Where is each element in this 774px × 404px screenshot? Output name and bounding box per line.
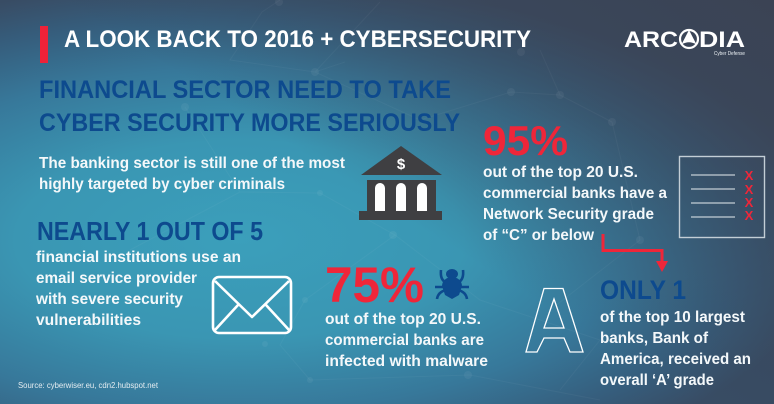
stat: 75% malware: commercial banks are xyxy=(325,332,484,349)
stat: 95% network security: Network Security grade xyxy=(483,206,654,223)
stat: 95% network security: 95% xyxy=(483,117,568,164)
stat: 75% malware: infected with malware xyxy=(325,353,488,370)
stat: nearly 1 out of 5 xyxy=(35,216,263,329)
heading: financial sector xyxy=(39,76,460,137)
stat: nearly 1 out of 5: with severe security xyxy=(35,291,183,308)
title: A LOOK BACK TO 2016 + CYBERSECURITY xyxy=(64,26,531,53)
icon: envelope xyxy=(213,277,291,333)
stat: nearly 1 out of 5: financial institutions use an xyxy=(36,249,241,266)
stat: 75% malware xyxy=(325,257,488,370)
logo: Arcadia Cyber Defense: DIA xyxy=(699,27,745,52)
icon: bug xyxy=(435,269,469,299)
text: banking sector: The banking sector is still one of the most xyxy=(39,155,345,172)
stat: only 1: America, received an xyxy=(600,351,751,368)
stat: nearly 1 out of 5: email service provider xyxy=(36,270,197,287)
stat: 95% network security: commercial banks have a xyxy=(483,185,667,202)
stat: nearly 1 out of 5: vulnerabilities xyxy=(36,312,141,329)
icon: failed checklist: X xyxy=(745,182,754,197)
stat: 95% network security xyxy=(483,117,667,244)
icon: failed checklist: X xyxy=(745,168,754,183)
stat: nearly 1 out of 5: NEARLY 1 OUT OF 5 xyxy=(37,216,263,246)
source: Source: cyberwiser.eu, cdn2.hubspot.net xyxy=(18,381,159,390)
stat: 75% malware: 75% xyxy=(325,257,424,313)
stat: only 1: of the top 10 largest xyxy=(600,309,745,326)
stat: only 1: ONLY 1 xyxy=(600,275,686,305)
text: banking sector: highly targeted by cyber criminals xyxy=(39,176,285,193)
stat: only 1: banks, Bank of xyxy=(600,330,709,347)
stat: 75% malware: out of the top 20 U.S. xyxy=(325,311,481,328)
logo: Arcadia Cyber Defense: ARC xyxy=(624,27,678,52)
stat: 95% network security: out of the top 20 U.S. xyxy=(483,164,638,181)
icon: failed checklist xyxy=(680,156,764,238)
arrow xyxy=(603,234,668,272)
stat: only 1 xyxy=(600,275,751,389)
stat: 95% network security: of “C” or below xyxy=(483,227,595,244)
stat: only 1: overall ‘A’ grade xyxy=(600,372,714,389)
text: banking sector xyxy=(39,155,345,193)
icon: failed checklist: X xyxy=(745,195,754,210)
icon: letter A grade xyxy=(526,288,583,352)
icon: bank: $ xyxy=(397,156,406,173)
icon: bank xyxy=(359,146,442,220)
logo: Arcadia Cyber Defense xyxy=(624,27,745,57)
logo: Arcadia Cyber Defense: Cyber Defense xyxy=(714,51,745,57)
icon: failed checklist: X xyxy=(745,208,754,223)
title accent bar xyxy=(40,26,48,63)
heading: financial sector: CYBER SECURITY MORE SERIOUSLY xyxy=(39,109,460,137)
heading: financial sector: FINANCIAL SECTOR NEED TO TAKE xyxy=(39,76,451,104)
